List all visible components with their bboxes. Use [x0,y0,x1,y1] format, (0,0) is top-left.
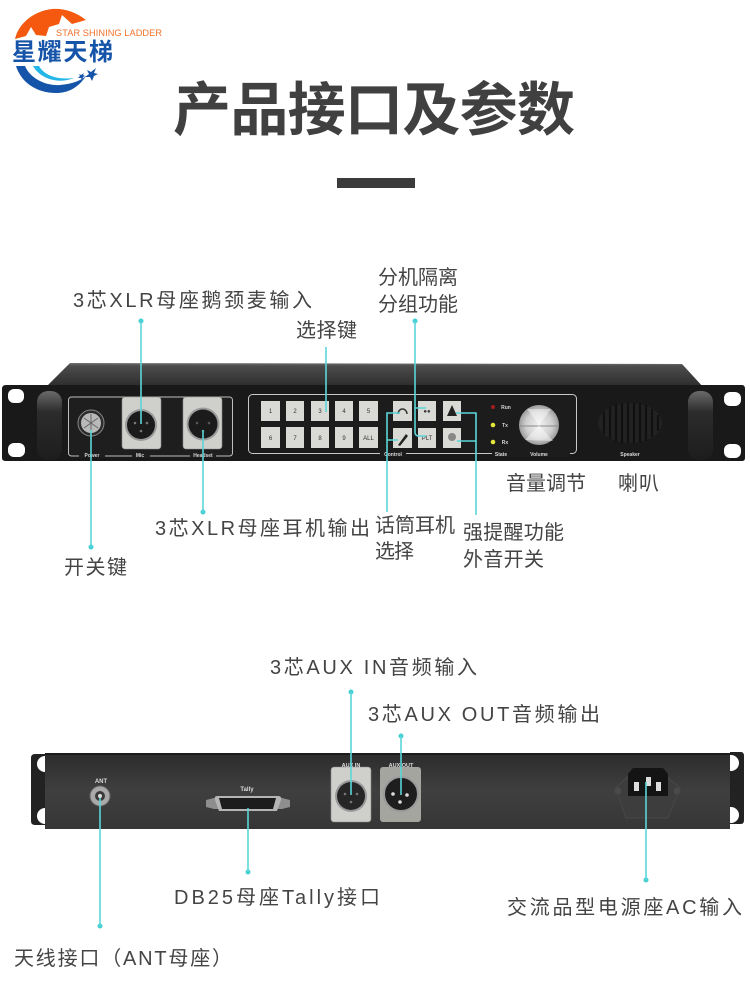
logo: brand name latin: STAR SHINING LADDER [56,28,162,38]
device top face [47,363,704,388]
label: AUX OUT: 3芯AUX OUT音频输出 [368,703,600,726]
AUX IN connector: AUX IN [342,763,360,769]
logo: orange globe [15,9,86,39]
logo: stars [78,68,98,81]
function buttons: ●● [423,409,431,415]
group labels: Volume [530,452,548,458]
label: mic input: 3芯XLR母座鹅颈麦输入 [73,289,312,312]
status LEDs [491,405,511,446]
label: group: 分组功能 [378,293,458,316]
AUX OUT connector [380,763,421,822]
volume knob [519,405,559,445]
number buttons: 6 [269,436,273,442]
line: power [88,430,94,550]
power/mic/headset group frame [68,397,232,456]
ANT connector [90,779,110,806]
number buttons [261,401,378,448]
label: handset headphone: 话筒耳机 [375,514,455,537]
group labels [380,451,640,458]
number buttons: 5 [367,409,371,415]
label: power: 开关键 [64,556,127,579]
title underline bar [337,178,415,188]
line: AUX OUT [398,734,404,795]
label: AC power: 交流品型电源座AC输入 [507,896,742,919]
logo [12,9,162,93]
logo: cyan swoosh [33,66,74,81]
number buttons: 4 [342,409,346,415]
status LEDs: Rx [502,440,508,446]
rear mounting ears [31,752,744,825]
label: alert: 强提醒功能 [463,521,564,544]
number buttons: 2 [293,409,297,415]
label: isolation: 分机隔离 [378,266,458,289]
device front face [2,385,745,461]
mic XLR connector: Mic [136,453,144,459]
function buttons: PLT [422,436,433,442]
label: AUX IN: 3芯AUX IN音频输入 [270,656,477,679]
AC power socket [614,768,680,818]
group labels: State [495,452,507,458]
mounting holes [8,389,741,458]
status LEDs: Run [501,405,511,411]
line: select keys [325,347,327,412]
control group frame [248,394,576,454]
rear body [45,753,730,829]
line: tally [246,808,250,874]
callout lines [88,318,648,928]
headset XLR connector: Headset [193,453,213,459]
number buttons: 1 [269,409,273,415]
title: 产品接口及参数 [173,78,575,143]
function buttons [393,401,461,448]
logo: blue swoosh [16,66,86,93]
Tally DB25 connector [206,787,290,811]
line: headset output [200,430,206,514]
label: tally: DB25母座Tally接口 [174,886,380,909]
AUX IN connector [331,763,371,822]
logo: brand name chinese: 星耀天梯 [12,39,113,66]
Tally DB25 connector: Tally [240,787,254,793]
line: mic input [138,318,144,424]
power button: Power [84,453,100,459]
line: AC power [644,782,648,882]
number buttons: 9 [342,436,346,442]
AUX OUT connector: AUX OUT [389,763,414,769]
number buttons: ALL [363,436,374,442]
ANT connector: ANT [95,779,107,785]
panel: rear device [31,752,744,829]
group labels: Control [384,452,402,458]
panel: front device [2,363,745,461]
label: select keys: 选择键 [296,319,357,342]
label: external speaker: 外音开关 [463,548,544,571]
mic XLR connector [122,397,161,459]
label: volume: 音量调节 [506,472,586,495]
power button [78,410,105,459]
line: alert and speaker switch [456,413,476,515]
handles [37,391,713,460]
headset XLR connector [183,397,222,459]
line: isolation and group [412,318,426,436]
speaker grille [598,403,662,443]
number buttons: 7 [293,436,297,442]
status LEDs: Tx [502,423,508,429]
number buttons: 8 [318,436,322,442]
label: select: 选择 [375,540,414,563]
label: headset output: 3芯XLR母座耳机输出 [155,517,370,540]
group labels: Speaker [620,452,640,458]
label: antenna: 天线接口（ANT母座） [14,947,232,970]
line: AUX IN [348,690,354,795]
line: handset headphone select [387,413,400,512]
line: antenna [98,798,102,928]
label: speaker: 喇叭 [618,472,659,495]
number buttons: 3 [318,409,322,415]
